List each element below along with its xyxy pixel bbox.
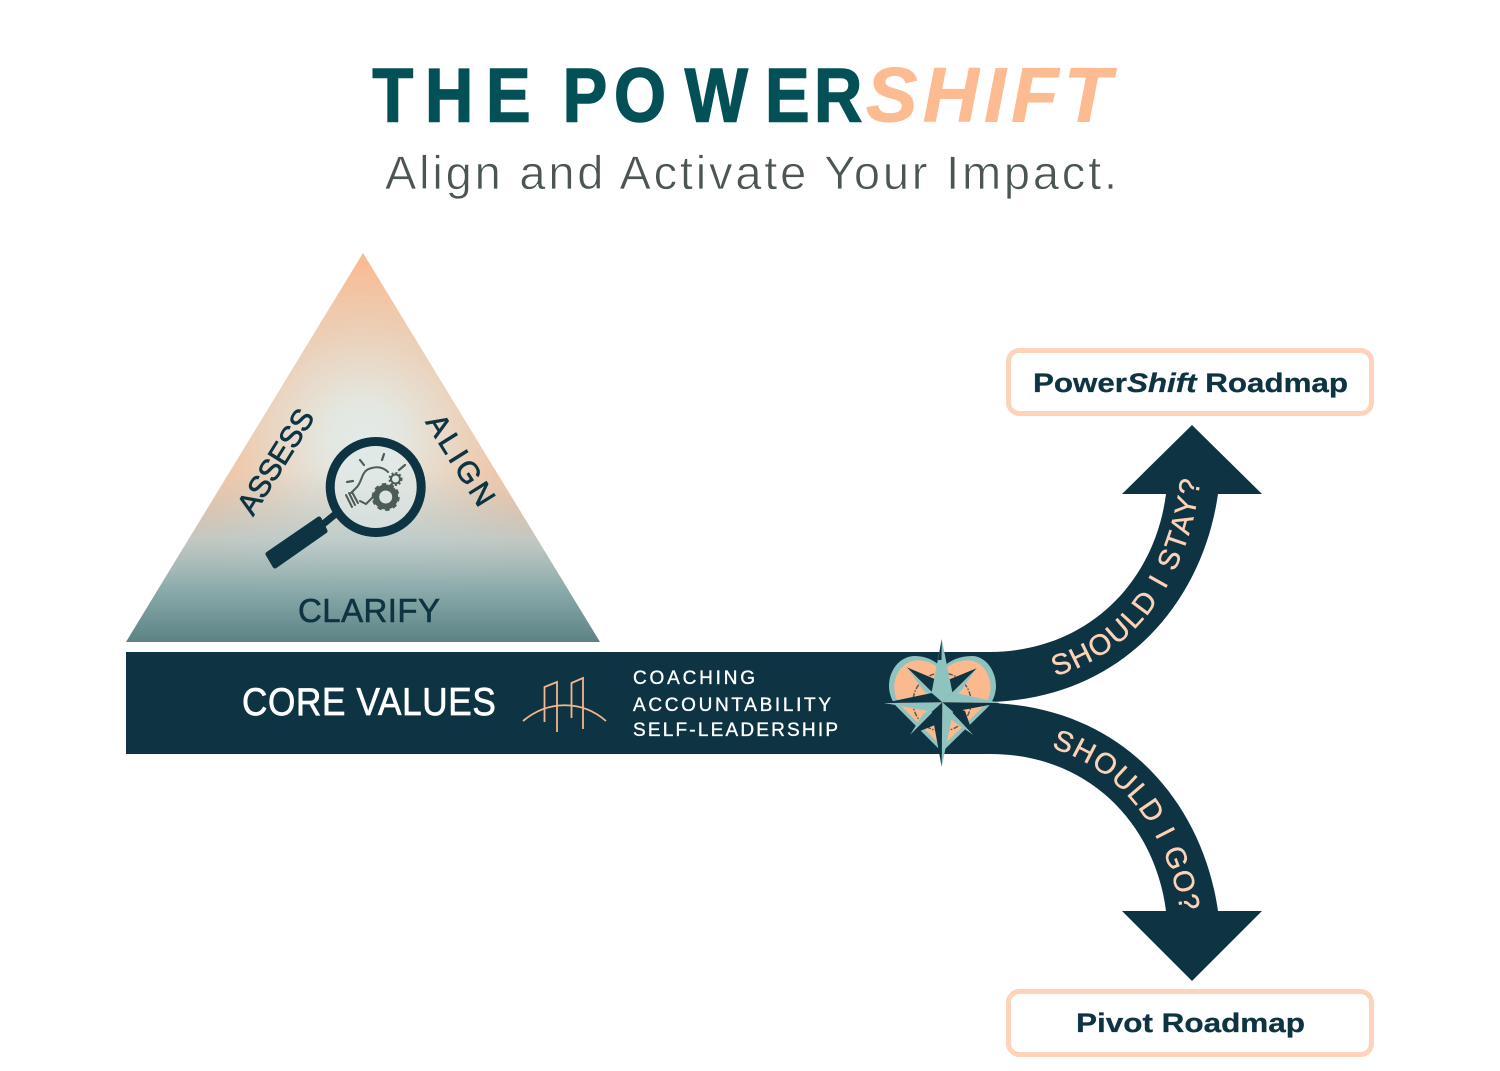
subtitle: Align and Activate Your Impact. [385,146,1117,199]
icon: bridge [523,678,606,732]
triangle background [126,253,600,642]
callout: powershift roadmap [1008,350,1372,414]
callout text: pivot roadmap: Pivot Roadmap [1076,1008,1305,1038]
arrow: should I stay [991,425,1262,702]
panel: core values bar [126,652,992,754]
heading: core values: CORE VALUES [242,679,496,723]
label: assess: ASSESS [231,403,321,521]
title [372,52,1117,138]
title: power: POWER [563,54,862,138]
label: align: ALIGN [419,408,501,512]
label: clarify: CLARIFY [298,592,440,629]
list item: coaching: COACHING [633,668,755,689]
callout: pivot roadmap [1008,992,1372,1054]
list: coaching accountability self-leadership [633,668,838,741]
icon: magnifying glass with light bulb and gears [268,442,421,566]
callout text: powershift roadmap: Power Shift Roadmap [1033,368,1348,398]
thorn ring [913,673,971,731]
arrow: should I go [991,703,1262,981]
arrow text: should i go: SHOULD I GO? [1054,730,1200,908]
list item: accountability: ACCOUNTABILITY [633,695,831,716]
main needles [884,639,1000,767]
diagonal needles [907,667,977,735]
icon: heart with compass rose [884,639,1000,767]
panel: triangle [126,253,600,642]
list item: self-leadership: SELF-LEADERSHIP [633,720,838,741]
heart fill [894,660,991,747]
title: the: THE [372,54,531,138]
title: shift: SHIFT [866,52,1117,138]
arrow text: should i stay: SHOULD I STAY? [1052,479,1200,674]
heart outline [889,656,996,752]
